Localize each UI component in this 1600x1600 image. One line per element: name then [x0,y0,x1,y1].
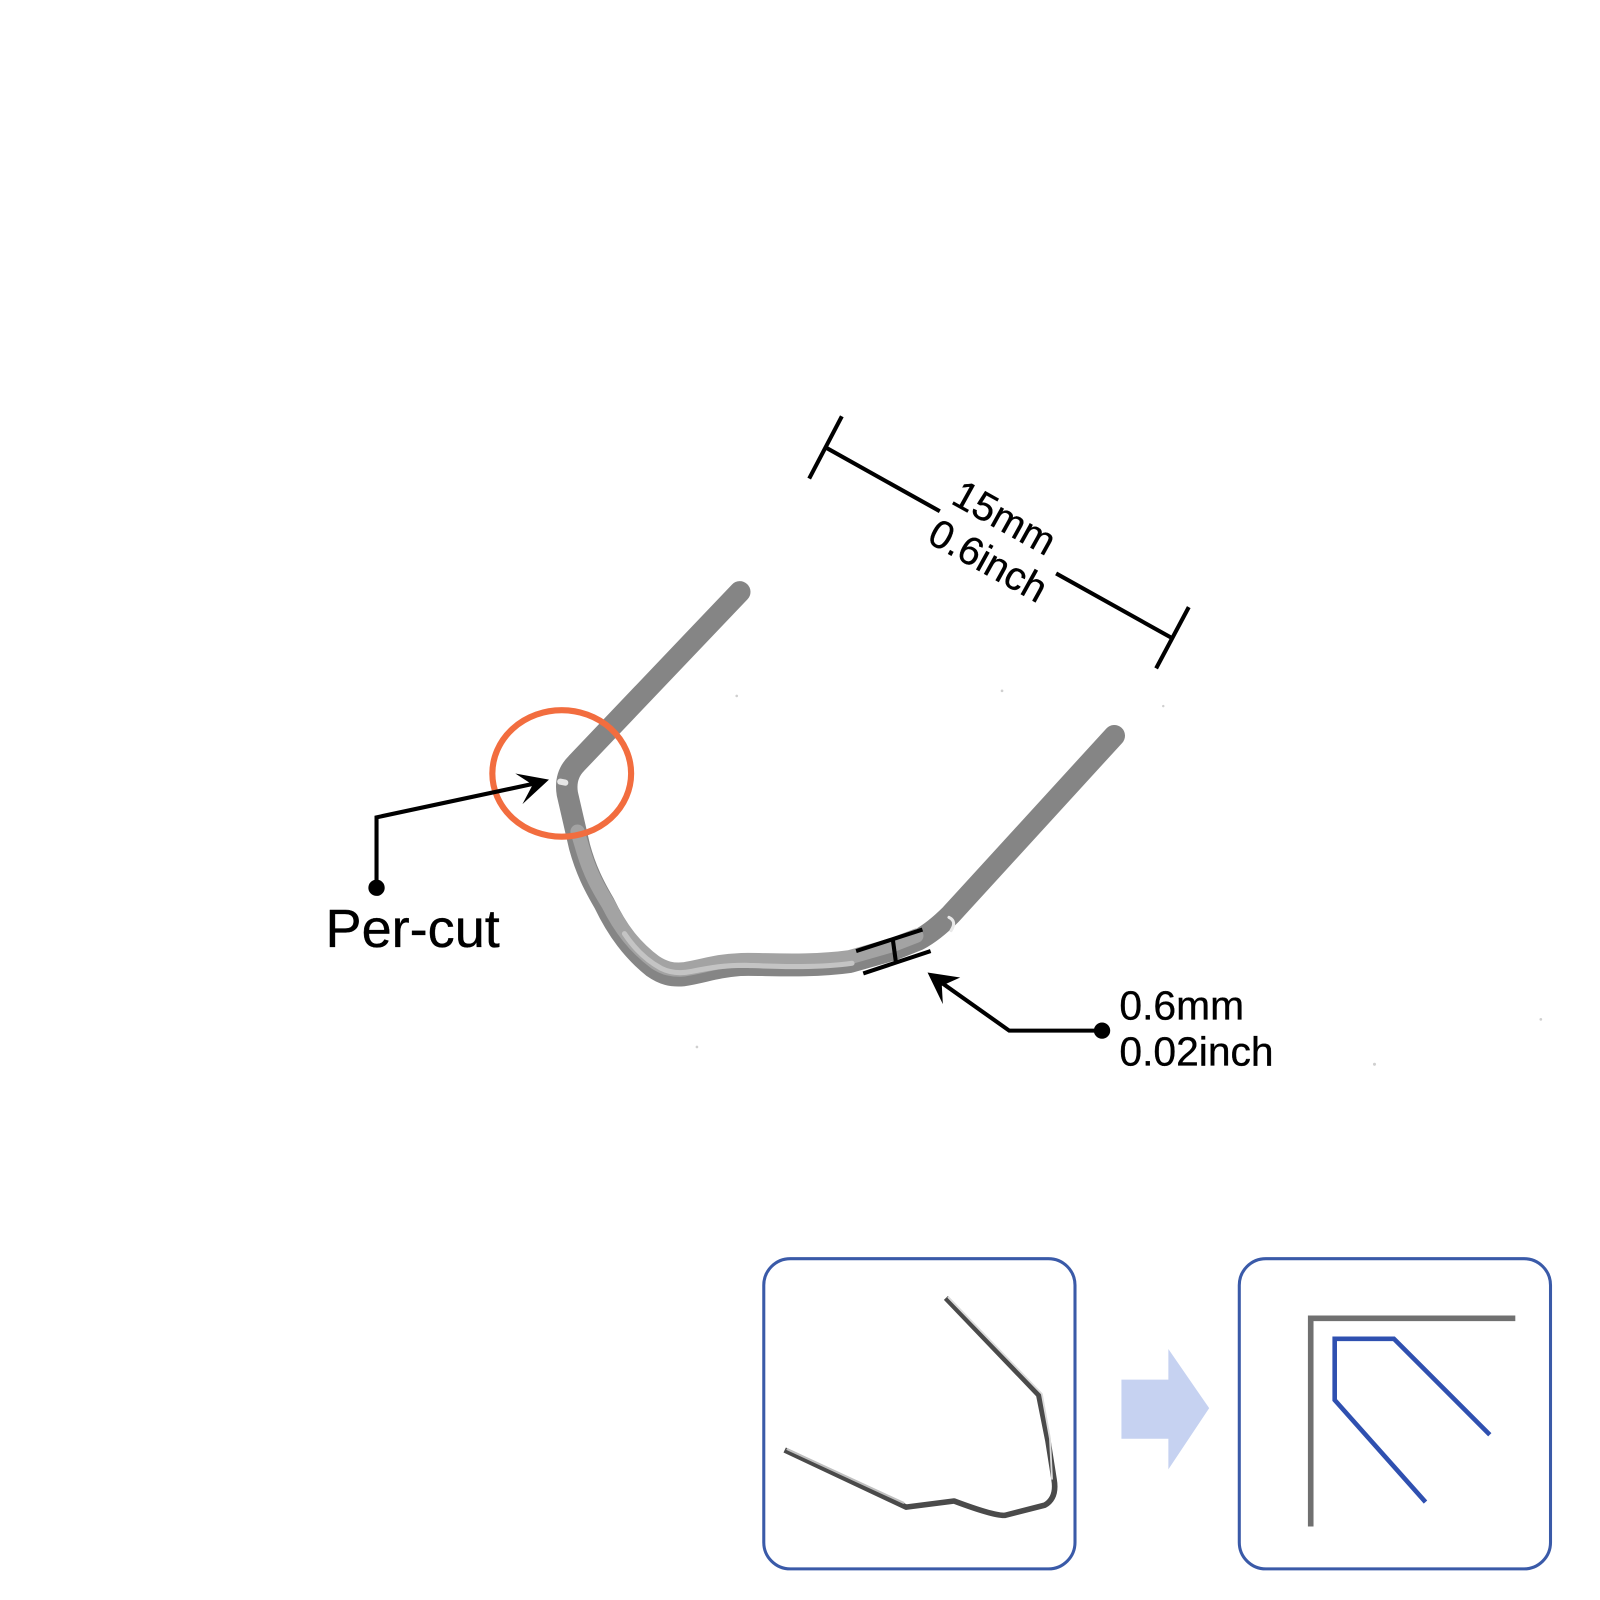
label: 0.6mm 0.02inch: 0.02inch [1119,1028,1274,1074]
label: 0.6mm 0.02inch [1119,982,1274,1074]
label: 15mm 0.6inch: 15mm [945,472,1063,564]
label: 15mm 0.6inch: 0.6inch [921,511,1055,611]
photo: bent metal staple wire [560,592,1114,976]
highlight circle around pre-cut [492,710,631,837]
arrow: shape to application [1121,1349,1209,1469]
dimension: 15mm length bracket [809,416,1189,668]
icon: gray corner [1311,1318,1515,1527]
callout arrow: wire thickness [928,972,1110,1039]
callout arrow: pre-cut [368,773,549,896]
faint background specks [696,689,1542,1066]
label: Per-cut: Per-cut [326,899,500,959]
icon: blue staple [1335,1339,1490,1502]
label: 0.6mm 0.02inch: 0.6mm [1119,982,1244,1028]
panel: staple shape [764,1259,1075,1569]
icon: staple wire [785,1297,1055,1515]
dimension: wire thickness marker [856,930,931,973]
label: 15mm 0.6inch [921,472,1063,611]
panel: staple in corner [1239,1259,1551,1569]
